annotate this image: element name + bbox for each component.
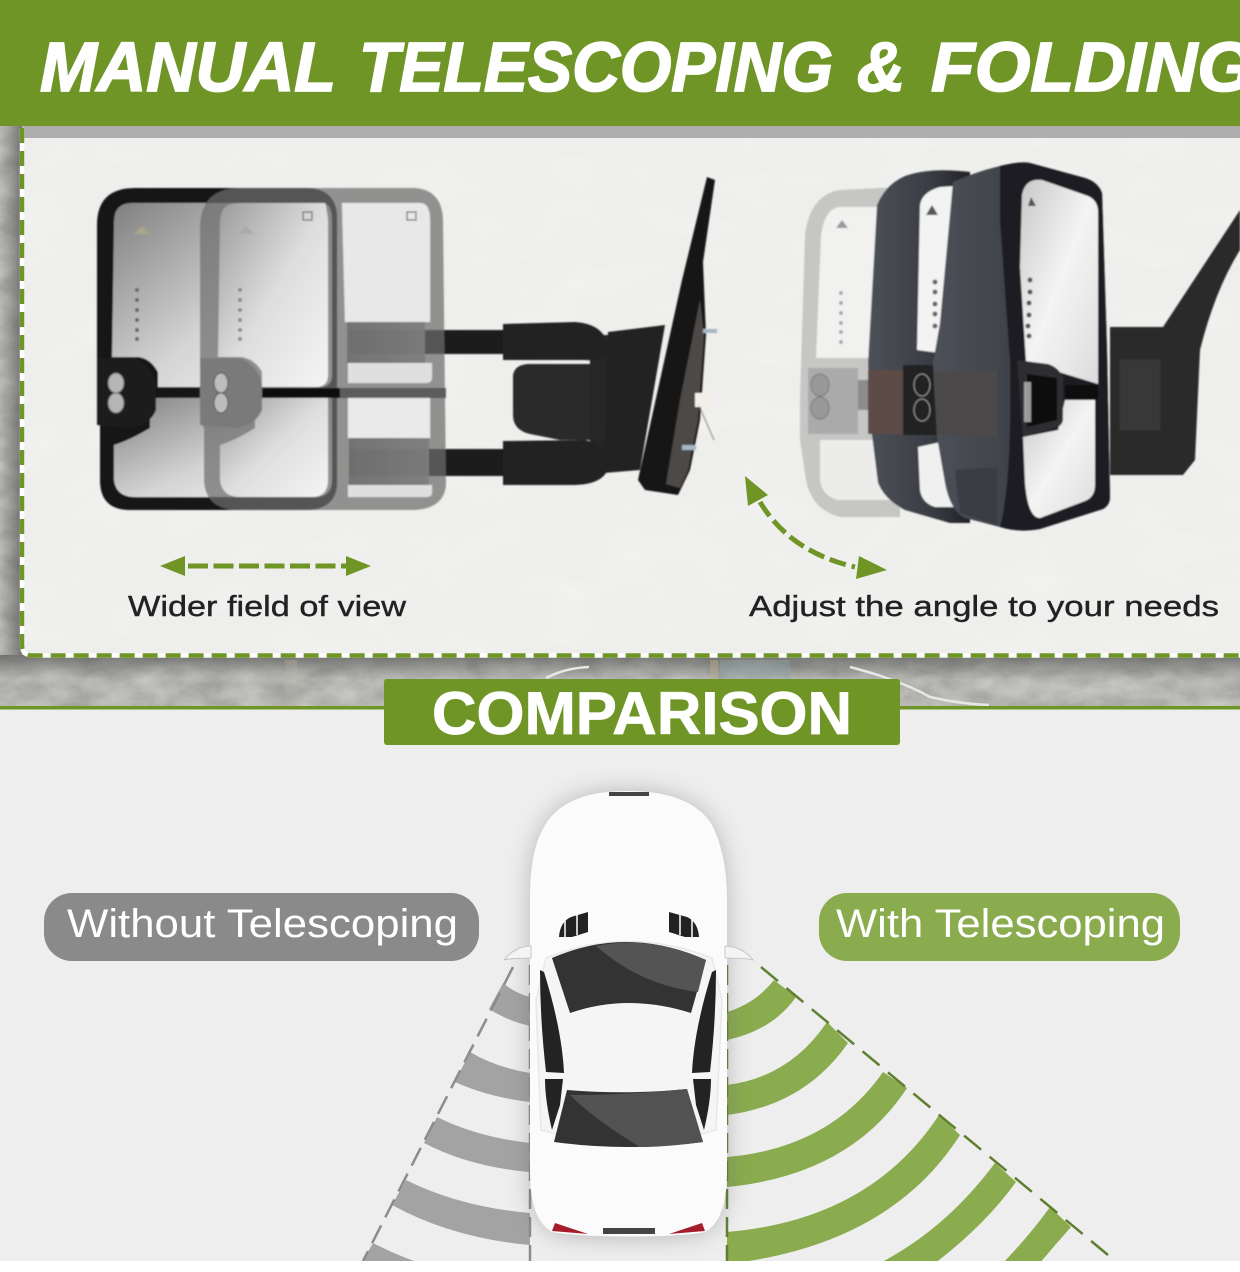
arrow: wider field of view — [160, 556, 371, 576]
folding mirror illustration — [800, 162, 1240, 531]
title banner: & — [857, 28, 905, 106]
pill: with telescoping: With Telescoping — [836, 902, 1165, 946]
mirror: extended position, translucent ghost — [200, 188, 446, 510]
mirror: ghost open position — [800, 187, 900, 517]
mirror arms and mount — [349, 177, 717, 495]
title banner: TELESCOPING — [359, 28, 833, 106]
car cabin outline — [536, 942, 722, 1142]
side windows — [540, 970, 716, 1073]
car front and rear strips — [603, 792, 655, 1234]
windshield — [552, 942, 706, 1013]
arrow: adjust the angle — [745, 476, 887, 579]
pill: with telescoping — [819, 893, 1180, 961]
title banner: FOLDING — [931, 28, 1240, 106]
car vents — [559, 912, 699, 937]
telescoping mirror illustration — [97, 177, 717, 510]
label: wider field of view: Wider field of view — [128, 591, 407, 623]
car top view — [504, 791, 753, 1238]
panel: mirror feature panel — [22, 126, 1240, 656]
label: adjust the angle: Adjust the angle to your needs — [749, 591, 1219, 623]
heading: comparison: COMPARISON — [432, 680, 852, 747]
field of view: with telescoping — [727, 965, 1108, 1264]
car mirrors — [504, 946, 753, 960]
rear window — [554, 1089, 703, 1147]
pill: without telescoping — [44, 893, 479, 961]
car tail lights — [552, 1223, 705, 1234]
title banner: MANUAL — [40, 28, 336, 106]
car body — [530, 791, 727, 1236]
field of view: without telescoping — [362, 965, 532, 1261]
comparison section background — [0, 707, 1240, 1261]
mirror: mid folding position — [868, 170, 970, 523]
title banner — [0, 0, 1240, 126]
mirror: front folded position — [933, 162, 1110, 531]
mirror arm and mount, right — [1110, 210, 1240, 475]
background: forest photo strip — [0, 126, 1240, 707]
pill: without telescoping: Without Telescoping — [67, 902, 458, 946]
mirror: retracted position, black frame — [97, 188, 337, 510]
